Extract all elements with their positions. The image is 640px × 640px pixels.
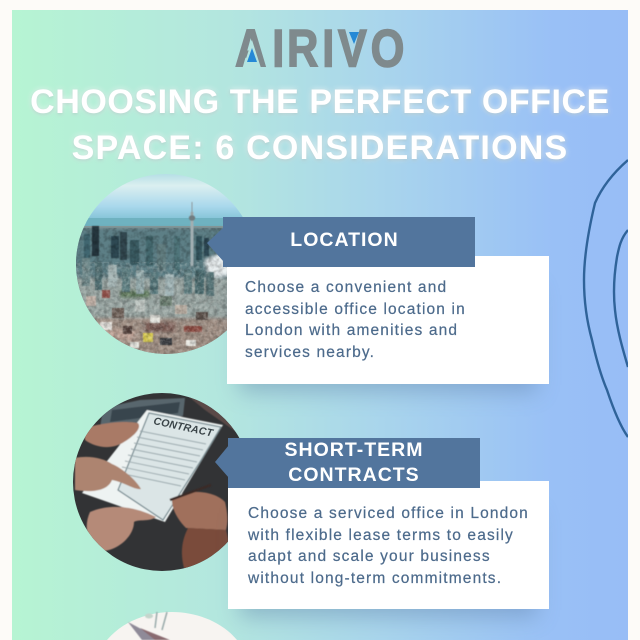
- card: location description: services nearby.: [245, 344, 375, 361]
- card: location description: London with amenities and: [245, 322, 458, 339]
- photo: third consideration (cropped): [107, 612, 237, 640]
- card: short-term contracts description: Choose a serviced office in London: [248, 505, 529, 522]
- card: short-term contracts description: with flexible lease terms to easily: [248, 527, 514, 544]
- decorative curves: [582, 159, 628, 438]
- title: [30, 83, 610, 167]
- heading: short-term contracts: [215, 438, 480, 488]
- card: short-term contracts description: without long-term commitments.: [248, 570, 502, 587]
- photo: contract signing: [73, 393, 240, 571]
- card: location description: accessible office location in: [245, 301, 466, 318]
- card: location description: Choose a convenient and: [245, 279, 447, 296]
- title: CHOOSING THE PERFECT OFFICE: [30, 83, 610, 121]
- heading: short-term contracts: CONTRACTS: [288, 464, 420, 486]
- card: short-term contracts description: [228, 481, 549, 609]
- photo: contract signing: CONTRACT: [152, 415, 215, 440]
- card: short-term contracts description: adapt and scale your business: [248, 548, 491, 565]
- heading: location: LOCATION: [290, 229, 399, 251]
- heading: short-term contracts: SHORT-TERM: [285, 439, 423, 461]
- photo: city skyline: [76, 174, 242, 354]
- heading: location: [207, 217, 475, 267]
- card: location description: [227, 256, 549, 384]
- title: SPACE: 6 CONSIDERATIONS: [72, 129, 568, 167]
